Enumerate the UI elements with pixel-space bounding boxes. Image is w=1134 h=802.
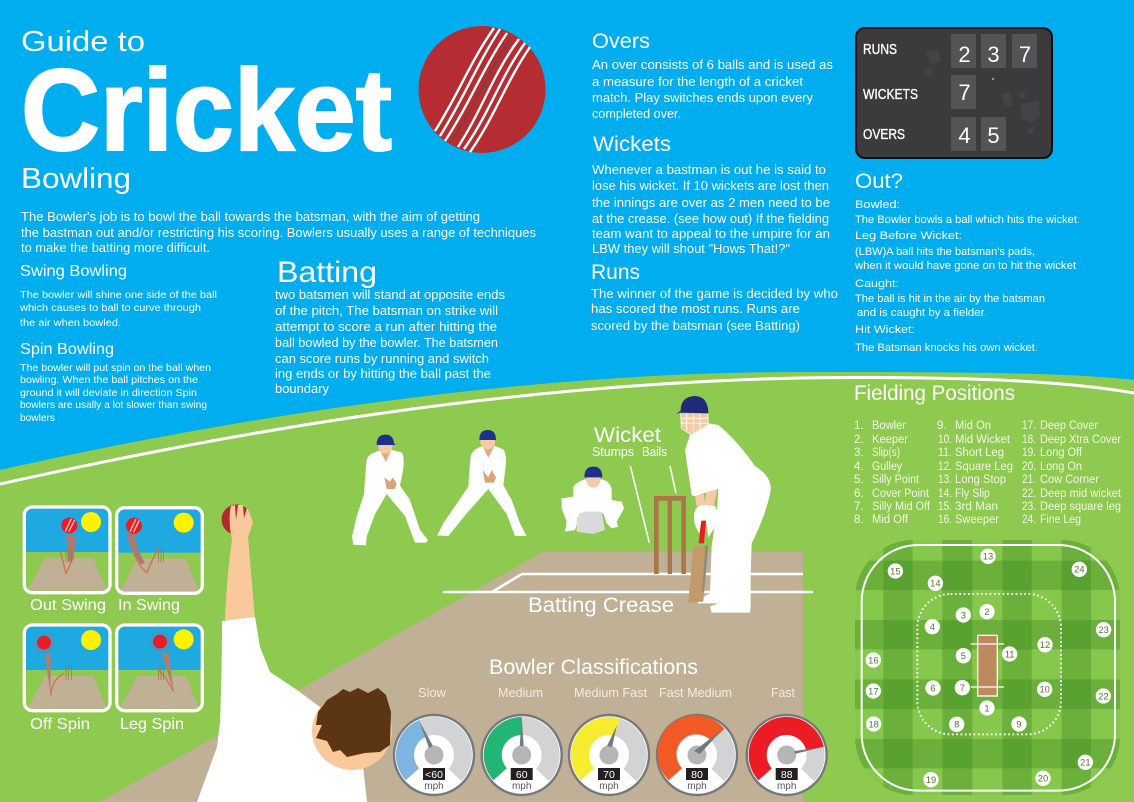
gauge: fast bbox=[747, 715, 827, 795]
overs section: completed over. bbox=[592, 106, 681, 121]
bowler hair bbox=[316, 688, 391, 757]
column three: Deep square leg bbox=[1040, 501, 1121, 513]
position markers: 19 bbox=[926, 775, 936, 785]
wicket label: Wicket bbox=[594, 424, 661, 447]
column three: Cow Corner bbox=[1040, 474, 1099, 486]
position markers: 20 bbox=[1038, 774, 1048, 784]
swing bowling section: which causes to ball to curve through bbox=[19, 302, 201, 314]
heading: batting: Batting bbox=[277, 256, 377, 289]
position markers: 15 bbox=[890, 566, 901, 576]
fielding positions list bbox=[854, 382, 1122, 526]
batsman bbox=[676, 396, 771, 613]
column two: Sweeper bbox=[955, 514, 999, 526]
gauge: medium fast: mph bbox=[599, 781, 619, 792]
column two: 12. bbox=[938, 461, 952, 473]
column one: Gulley bbox=[872, 461, 902, 473]
gauge: fast medium bbox=[657, 715, 737, 795]
column two: 16. bbox=[938, 514, 952, 526]
speed labels bbox=[418, 685, 795, 700]
fielder one bbox=[352, 435, 428, 545]
batting section: of the pitch, The batsman on strike will bbox=[275, 303, 498, 318]
position markers: 16 bbox=[868, 655, 879, 665]
heading: out: Out? bbox=[855, 170, 903, 193]
spin bowling section: bowlers bbox=[20, 412, 55, 424]
scoreboard labels: WICKETS bbox=[863, 86, 918, 103]
out section: Caught: bbox=[855, 278, 899, 290]
swing bowling section: The bowler will shine one side of the ball bbox=[20, 289, 217, 301]
wickets section: lose his wicket. If 10 wickets are lost then bbox=[592, 178, 829, 193]
bowling intro text bbox=[21, 209, 536, 255]
batsman body bbox=[685, 423, 771, 613]
column one: 8. bbox=[854, 514, 864, 526]
heading: runs: Runs bbox=[591, 261, 640, 284]
column three: 23. bbox=[1022, 501, 1036, 513]
column one: Slip(s) bbox=[872, 447, 900, 459]
scoreboard labels: OVERS bbox=[863, 126, 905, 143]
column three: 19. bbox=[1022, 447, 1036, 459]
gauge: fast medium: 80 bbox=[691, 769, 703, 781]
diagram labels: Out Swing bbox=[30, 597, 106, 614]
batting section: can score runs by running and switch bbox=[275, 351, 489, 366]
out section: The Bowler bowls a ball which hits the wicket. bbox=[855, 214, 1080, 226]
speed labels: Slow bbox=[418, 685, 447, 700]
gauge: fast medium: mph bbox=[687, 781, 707, 792]
score tiles: 5 bbox=[987, 123, 1000, 148]
column two: Long Stop bbox=[955, 474, 1006, 486]
gauge: medium bbox=[482, 715, 562, 795]
position markers: 8 bbox=[954, 720, 959, 730]
bowler classifications bbox=[394, 656, 827, 795]
column one: 1. bbox=[854, 420, 864, 432]
out section: Bowled: bbox=[855, 199, 900, 211]
wickets section: Whenever a bastman is out he is said to bbox=[592, 162, 826, 177]
column two: 11. bbox=[938, 447, 952, 459]
column one: Silly Mid Off bbox=[872, 501, 931, 513]
fielding map bbox=[855, 540, 1120, 795]
column two: 13. bbox=[938, 474, 952, 486]
runs section: scored by the batsman (see Batting) bbox=[591, 318, 800, 333]
swing and spin diagrams bbox=[23, 507, 204, 713]
bowler ball bbox=[222, 504, 252, 534]
wicket stumps bbox=[654, 496, 686, 574]
bat bbox=[688, 520, 708, 603]
overs section: An over consists of 6 balls and is used as bbox=[592, 57, 833, 72]
diagram labels: Off Spin bbox=[30, 716, 90, 733]
column three: 17. bbox=[1022, 420, 1036, 432]
subtitle: bowling: Bowling bbox=[21, 163, 131, 195]
title: guide to: Guide to bbox=[21, 26, 145, 58]
out section bbox=[854, 170, 1080, 354]
icon: cricket ball bbox=[418, 26, 546, 153]
overs section bbox=[592, 30, 833, 121]
spin bowling section: ground it will deviate in direction Spin bbox=[20, 387, 197, 399]
spin bowling section: bowling. When the ball pitches on the bbox=[20, 374, 198, 386]
column one: Cover Point bbox=[872, 488, 930, 500]
pointer lines bbox=[630, 466, 676, 543]
column three: 22. bbox=[1022, 488, 1036, 500]
swing bowling section bbox=[19, 263, 217, 329]
batting crease label: Batting Crease bbox=[528, 594, 674, 617]
runs section: The winner of the game is decided by who bbox=[591, 286, 838, 301]
column one: Mid Off bbox=[872, 514, 909, 526]
column two: 15. bbox=[938, 501, 952, 513]
out section: The Batsman knocks his own wicket. bbox=[855, 342, 1038, 354]
column two: Square Leg bbox=[955, 461, 1013, 473]
score tiles: 2 bbox=[958, 42, 971, 67]
out section: The ball is hit in the air by the batsman bbox=[855, 293, 1045, 305]
diagram: in swing bbox=[115, 508, 204, 596]
wicket keeper bbox=[562, 467, 624, 534]
column one bbox=[854, 420, 931, 526]
batting section: attempt to score a run after hitting the bbox=[275, 319, 497, 334]
column two: 10. bbox=[938, 434, 952, 446]
column one: 3. bbox=[854, 447, 864, 459]
column one: 6. bbox=[854, 488, 864, 500]
position markers: 23 bbox=[1098, 625, 1109, 635]
diagram labels bbox=[30, 597, 184, 733]
batsman arms bbox=[695, 489, 717, 507]
column three: 20. bbox=[1022, 461, 1036, 473]
position markers bbox=[866, 549, 1111, 787]
bowling intro text: the bastman out and/or restricting his scoring. Bowlers usually uses a range of techniques bbox=[21, 225, 536, 240]
column one: Bowler bbox=[872, 420, 906, 432]
batting section: ball bowled by the bowler. The batsmen bbox=[275, 335, 498, 350]
column one: 7. bbox=[854, 501, 864, 513]
batsman gloves bbox=[694, 505, 719, 537]
cricket pitch bbox=[100, 552, 813, 802]
overs section: match. Play switches ends upon every bbox=[592, 90, 813, 105]
position markers: 5 bbox=[961, 651, 966, 661]
column three: 18. bbox=[1022, 434, 1036, 446]
diagram: out swing bbox=[23, 507, 112, 595]
bowler head bbox=[312, 692, 392, 770]
out section: Hit Wicket: bbox=[855, 324, 915, 336]
column one: Silly Point bbox=[872, 474, 920, 486]
bowler shirt bbox=[197, 617, 367, 802]
gauge: medium fast bbox=[569, 715, 649, 795]
mown field stripes bbox=[855, 540, 1120, 795]
wicket label: Stumps bbox=[592, 444, 634, 459]
column two: 3rd Man bbox=[955, 501, 998, 513]
position markers: 17 bbox=[868, 686, 879, 696]
runs section: has scored the most runs. Runs are bbox=[591, 301, 800, 316]
column one: Keeper bbox=[872, 434, 908, 446]
gauge: fast: 88 bbox=[781, 769, 793, 781]
position markers: 9 bbox=[1016, 719, 1022, 729]
position markers: 3 bbox=[961, 610, 966, 620]
green outfield bbox=[0, 372, 1134, 802]
spin bowling section bbox=[20, 341, 211, 424]
heading: fielding positions: Fielding Positions bbox=[854, 382, 1015, 405]
column three bbox=[1022, 420, 1122, 526]
boundary rope curve bbox=[0, 378, 1134, 484]
diagram labels: Leg Spin bbox=[120, 716, 184, 733]
speed labels: Fast bbox=[771, 685, 795, 700]
diagram: off spin bbox=[23, 625, 112, 713]
out section: Leg Before Wicket: bbox=[855, 230, 962, 242]
bowler arm and hand bbox=[225, 505, 255, 620]
column three: 24. bbox=[1022, 514, 1036, 526]
batting section: boundary bbox=[275, 381, 329, 396]
position markers: 6 bbox=[930, 683, 936, 693]
wicket label bbox=[592, 424, 667, 459]
bowling intro text: The Bowler's job is to bowl the ball towards the batsman, with the aim of getting bbox=[21, 209, 480, 224]
scoreboard labels bbox=[863, 41, 918, 143]
wickets section bbox=[592, 133, 830, 256]
gauge: slow: <60 bbox=[425, 769, 443, 781]
heading: bowler classifications: Bowler Classifications bbox=[489, 656, 698, 679]
heading: spin bowling: Spin Bowling bbox=[20, 341, 114, 358]
wickets section: the innings are over as 2 men need to be bbox=[592, 195, 830, 210]
gauge: medium: mph bbox=[512, 781, 531, 792]
position markers: 7 bbox=[960, 683, 965, 693]
gauge: fast: mph bbox=[777, 781, 796, 792]
column one: 5. bbox=[854, 474, 864, 486]
score tiles: 3 bbox=[987, 42, 1000, 67]
title: cricket: Cricket bbox=[21, 45, 392, 175]
swing bowling section: the air when bowled. bbox=[20, 317, 121, 329]
column three: Deep Cover bbox=[1040, 420, 1098, 432]
position markers: 22 bbox=[1098, 691, 1109, 701]
heading: wickets: Wickets bbox=[593, 133, 671, 156]
speed labels: Fast Medium bbox=[659, 685, 732, 700]
wickets section: team want to appeal to the umpire for an bbox=[592, 226, 830, 241]
batting section: two batsmen will stand at opposite ends bbox=[275, 287, 505, 302]
column two: Mid On bbox=[955, 420, 991, 432]
position markers: 2 bbox=[984, 607, 990, 617]
column two bbox=[937, 420, 1013, 526]
column two: 14. bbox=[938, 488, 952, 500]
column three: Deep Xtra Cover bbox=[1040, 434, 1121, 446]
diagram labels: In Swing bbox=[118, 597, 180, 614]
position markers: 13 bbox=[983, 552, 993, 562]
position markers: 14 bbox=[930, 579, 941, 589]
position markers: 12 bbox=[1040, 640, 1050, 650]
column one: 4. bbox=[854, 461, 864, 473]
bowling intro text: to make the batting more difficult. bbox=[21, 240, 210, 255]
column one: 2. bbox=[854, 434, 864, 446]
gauge: slow: mph bbox=[424, 781, 444, 792]
column two: Fly Slip bbox=[955, 488, 990, 500]
diagram: leg spin bbox=[115, 625, 204, 713]
out section: and is caught by a fielder. bbox=[857, 307, 987, 319]
runs section bbox=[591, 261, 838, 333]
column three: Long Off bbox=[1040, 447, 1083, 459]
gauge: medium: 60 bbox=[516, 769, 528, 781]
column three: Long On bbox=[1040, 461, 1082, 473]
position markers: 4 bbox=[930, 622, 935, 632]
position markers: 18 bbox=[868, 719, 879, 729]
wickets section: LBW they will shout "Hows That!?" bbox=[592, 241, 790, 256]
position markers: 1 bbox=[984, 703, 990, 713]
position markers: 10 bbox=[1039, 685, 1050, 695]
gauge: medium fast: 70 bbox=[603, 769, 615, 781]
out section: (LBW)A ball hits the batsman's pads, bbox=[855, 246, 1035, 258]
column two: 9. bbox=[937, 420, 947, 432]
wicket label: Bails bbox=[642, 444, 667, 459]
position markers: 11 bbox=[1005, 649, 1015, 659]
score tiles: 7 bbox=[1019, 42, 1031, 67]
score tiles: 7 bbox=[958, 80, 971, 105]
column three: 21. bbox=[1022, 474, 1036, 486]
column two: Short Leg bbox=[955, 447, 1004, 459]
bowler figure bbox=[197, 504, 392, 802]
gauge: slow bbox=[394, 715, 474, 795]
spin bowling section: The bowler will put spin on the ball when bbox=[20, 362, 211, 374]
column two: Mid Wicket bbox=[955, 434, 1011, 446]
column three: Deep mid wicket bbox=[1040, 488, 1122, 500]
scoreboard labels: RUNS bbox=[863, 41, 897, 58]
heading: overs: Overs bbox=[592, 30, 650, 53]
overs section: a measure for the length of a cricket bbox=[592, 74, 803, 89]
speed labels: Medium bbox=[498, 685, 543, 700]
scoreboard bbox=[856, 28, 1052, 158]
central pitch bbox=[971, 635, 1004, 696]
wickets section: at the crease. (see how out) If the fielding bbox=[592, 211, 829, 226]
batsman helmet and grill bbox=[676, 396, 708, 435]
score tiles bbox=[951, 34, 1037, 151]
fielders and wicket scene bbox=[352, 430, 686, 574]
spin bowling section: bowlers are usally a lot slower than swing bbox=[20, 399, 207, 411]
out section: when it would have gone on to hit the wicket bbox=[854, 260, 1076, 272]
fielder two bbox=[437, 430, 527, 536]
boundary line bbox=[862, 545, 1115, 791]
heading: swing bowling: Swing Bowling bbox=[20, 263, 127, 280]
position markers: 21 bbox=[1080, 758, 1091, 768]
speed labels: Medium Fast bbox=[574, 685, 647, 700]
score tiles: 4 bbox=[958, 123, 971, 148]
thirty yard circle bbox=[917, 594, 1061, 734]
title block bbox=[21, 26, 392, 195]
batting section: ing ends or by hitting the ball past the bbox=[275, 366, 491, 381]
column three: Fine Leg bbox=[1040, 514, 1081, 526]
position markers: 24 bbox=[1074, 565, 1085, 575]
batting section bbox=[275, 256, 505, 396]
